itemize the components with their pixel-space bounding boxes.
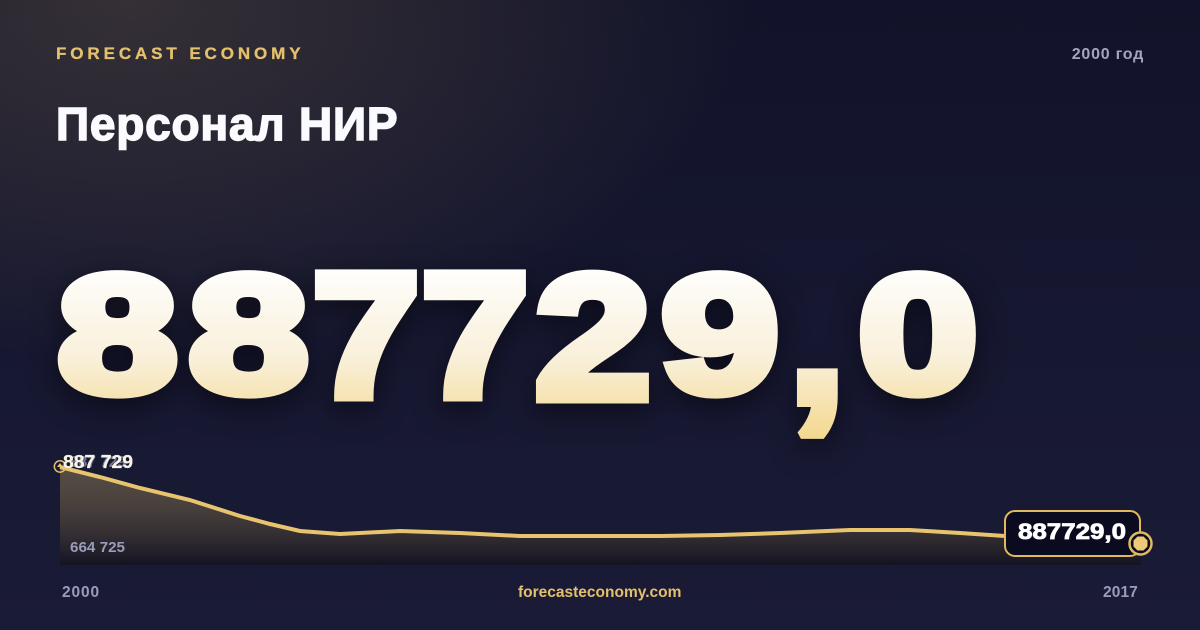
overlapping max labels: 887 729: [63, 451, 133, 472]
main value: ,: [786, 217, 848, 447]
chart line: [60, 467, 1005, 536]
chart area: [60, 467, 1141, 565]
value callout: 887729,0: [1018, 519, 1126, 544]
main value: 7: [313, 237, 419, 434]
year label: 2000 год: [1072, 46, 1144, 63]
brand label: FORECAST ECONOMY: [56, 44, 304, 63]
start year: 2000: [62, 584, 100, 601]
end marker: [1130, 532, 1152, 554]
start marker: [54, 461, 66, 472]
main value: 2: [535, 239, 651, 435]
main value: 8: [189, 242, 308, 427]
source url: forecasteconomy.com: [518, 584, 681, 601]
main value: 0: [858, 242, 978, 427]
main value: 9: [661, 242, 779, 427]
min label: 664 725: [70, 540, 125, 556]
overlapping max labels: 887 729: [70, 454, 126, 471]
value callout: [1005, 511, 1140, 556]
title: Персонал НИР: [56, 98, 398, 150]
end year: 2017: [1103, 584, 1138, 601]
main value: 7: [422, 237, 528, 434]
main value: 8: [58, 242, 177, 427]
